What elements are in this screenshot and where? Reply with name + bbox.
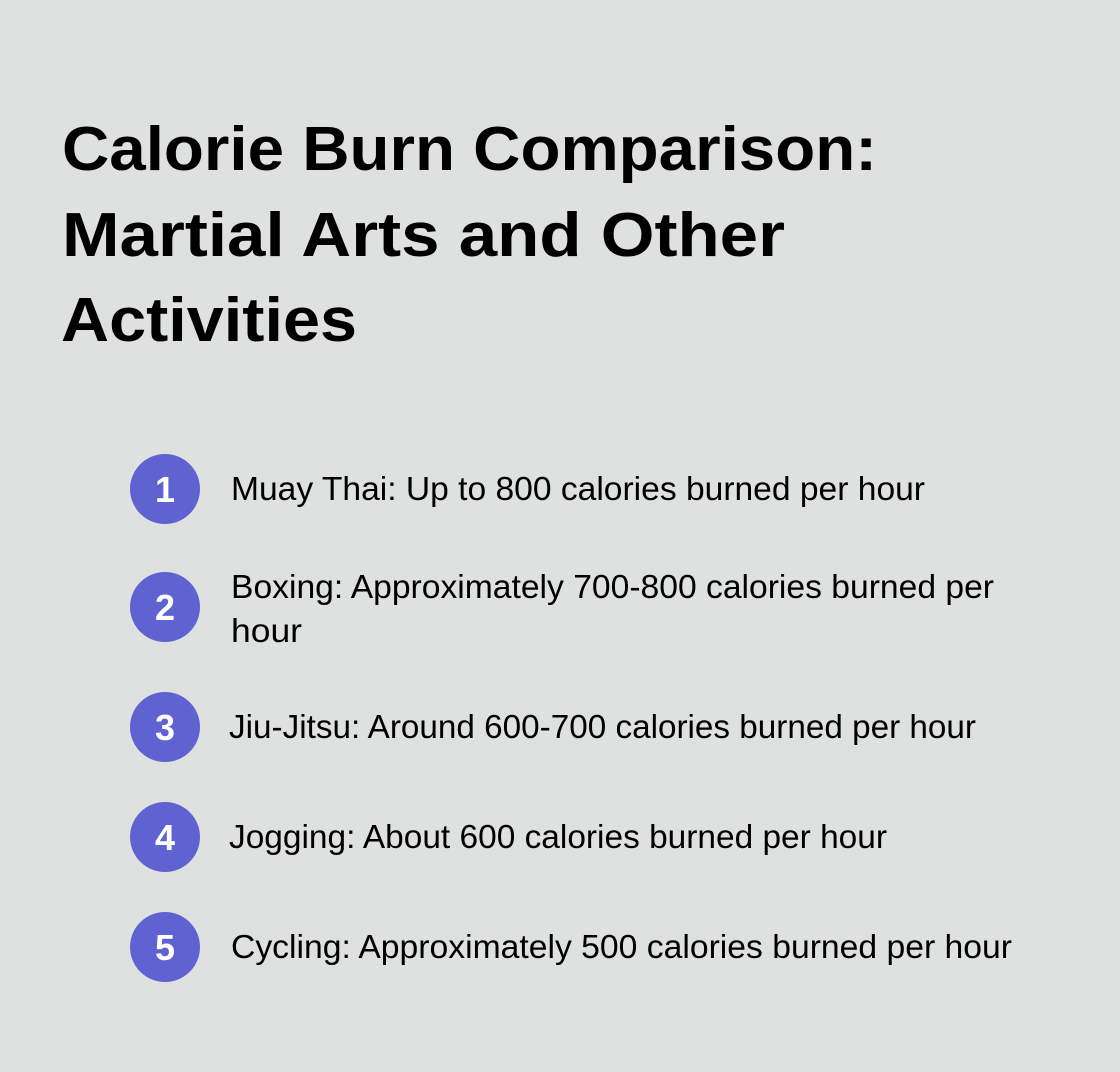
number badge 3 xyxy=(130,692,200,762)
list item 5: Cycling xyxy=(130,912,1012,982)
number badge 1 xyxy=(130,454,200,524)
number badge 3: 3 xyxy=(155,707,175,748)
number badge 1: 1 xyxy=(155,469,175,510)
number badge 2: 2 xyxy=(155,587,175,628)
text: Muay Thai: Muay Thai: Up to 800 calories burned per hour xyxy=(231,470,925,507)
text: Boxing xyxy=(231,568,994,649)
text: Jogging: Jogging: About 600 calories burned per hour xyxy=(229,818,887,855)
list item 1: Muay Thai xyxy=(130,454,925,524)
text: Boxing: Boxing: Approximately 700-800 calories burned per xyxy=(231,568,994,605)
number badge 2 xyxy=(130,572,200,642)
text: Boxing: hour xyxy=(231,612,302,649)
number badge 5: 5 xyxy=(155,927,175,968)
number badge 4: 4 xyxy=(155,817,175,858)
text: Cycling: Cycling: Approximately 500 calories burned per hour xyxy=(231,928,1012,965)
list item 2: Boxing xyxy=(130,568,994,649)
number badge 4 xyxy=(130,802,200,872)
title: Martial Arts and Other xyxy=(62,201,785,270)
title: Calorie Burn Comparison: xyxy=(62,115,877,184)
title: Activities xyxy=(61,286,357,355)
text: Jiu-Jitsu: Jiu-Jitsu: Around 600-700 calories burned per hour xyxy=(229,708,976,745)
number badge 5 xyxy=(130,912,200,982)
list item 3: Jiu-Jitsu xyxy=(130,692,976,762)
title xyxy=(61,115,877,355)
list item 4: Jogging xyxy=(130,802,887,872)
